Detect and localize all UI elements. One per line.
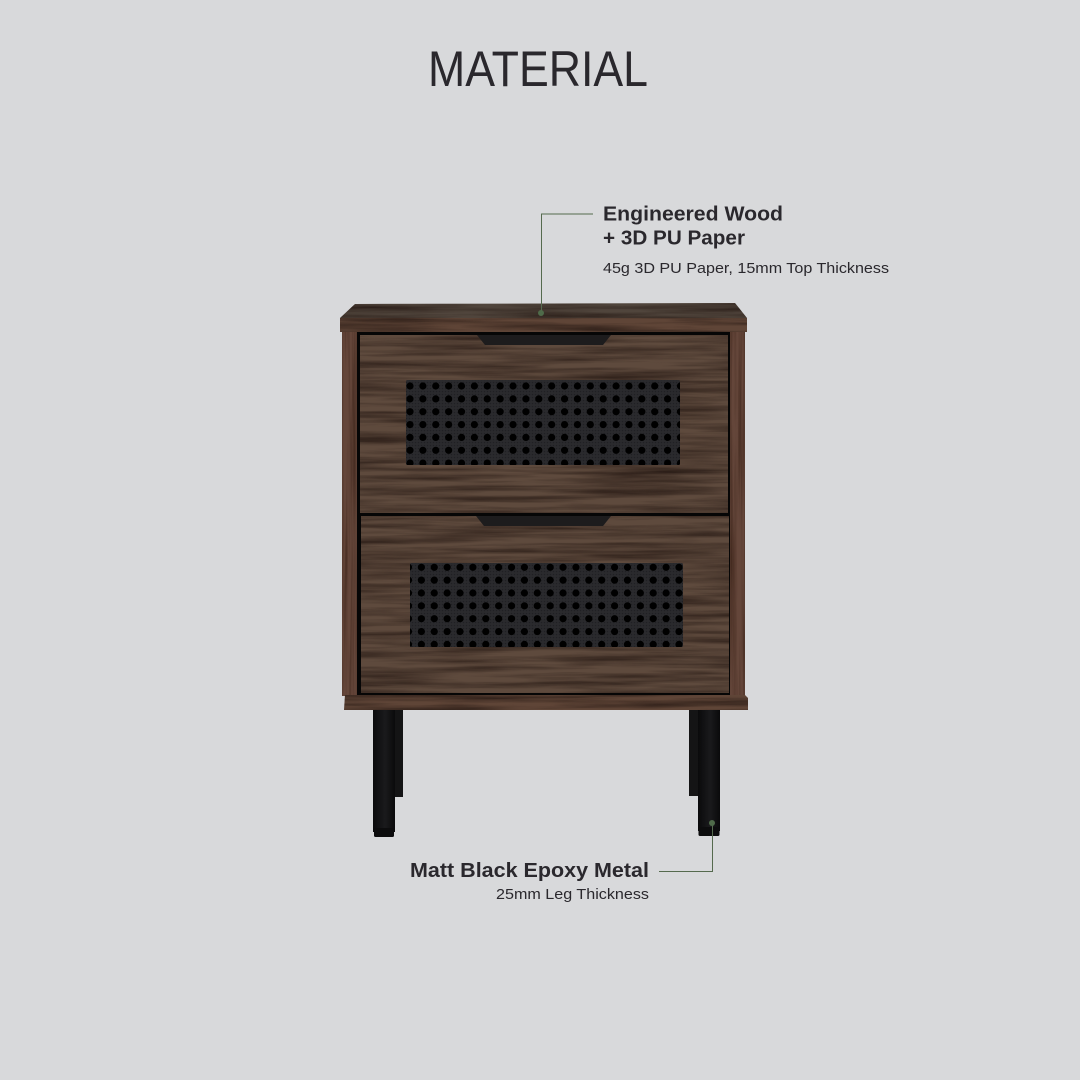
- heading: metal: Matt Black Epoxy Metal: [410, 860, 649, 882]
- lower drawer: [361, 516, 729, 693]
- leader dot: leg: [709, 820, 715, 826]
- lower handle: [476, 516, 611, 526]
- leader line: top: [542, 214, 593, 313]
- title: MATERIAL: [428, 41, 648, 97]
- callout: matt black epoxy metal: [410, 820, 715, 903]
- heading: 3D PU paper: + 3D PU Paper: [603, 228, 745, 250]
- leader dot: top: [538, 310, 544, 316]
- detail: leg thickness: 25mm Leg Thickness: [496, 886, 649, 903]
- leader line: leg: [659, 823, 712, 872]
- base board: [344, 695, 748, 710]
- cabinet carcass: [342, 332, 745, 696]
- nightstand illustration: [340, 303, 748, 837]
- back and front legs: [373, 710, 720, 837]
- upper cane panel: [406, 380, 684, 465]
- upper handle: [477, 335, 611, 345]
- detail: top thickness: 45g 3D PU Paper, 15mm Top Thickness: [603, 260, 889, 277]
- lower cane panel: [408, 563, 684, 647]
- heading: engineered wood: Engineered Wood: [603, 204, 783, 226]
- top board: [340, 303, 747, 332]
- callout: engineered wood: [538, 204, 889, 316]
- upper drawer: [360, 335, 728, 513]
